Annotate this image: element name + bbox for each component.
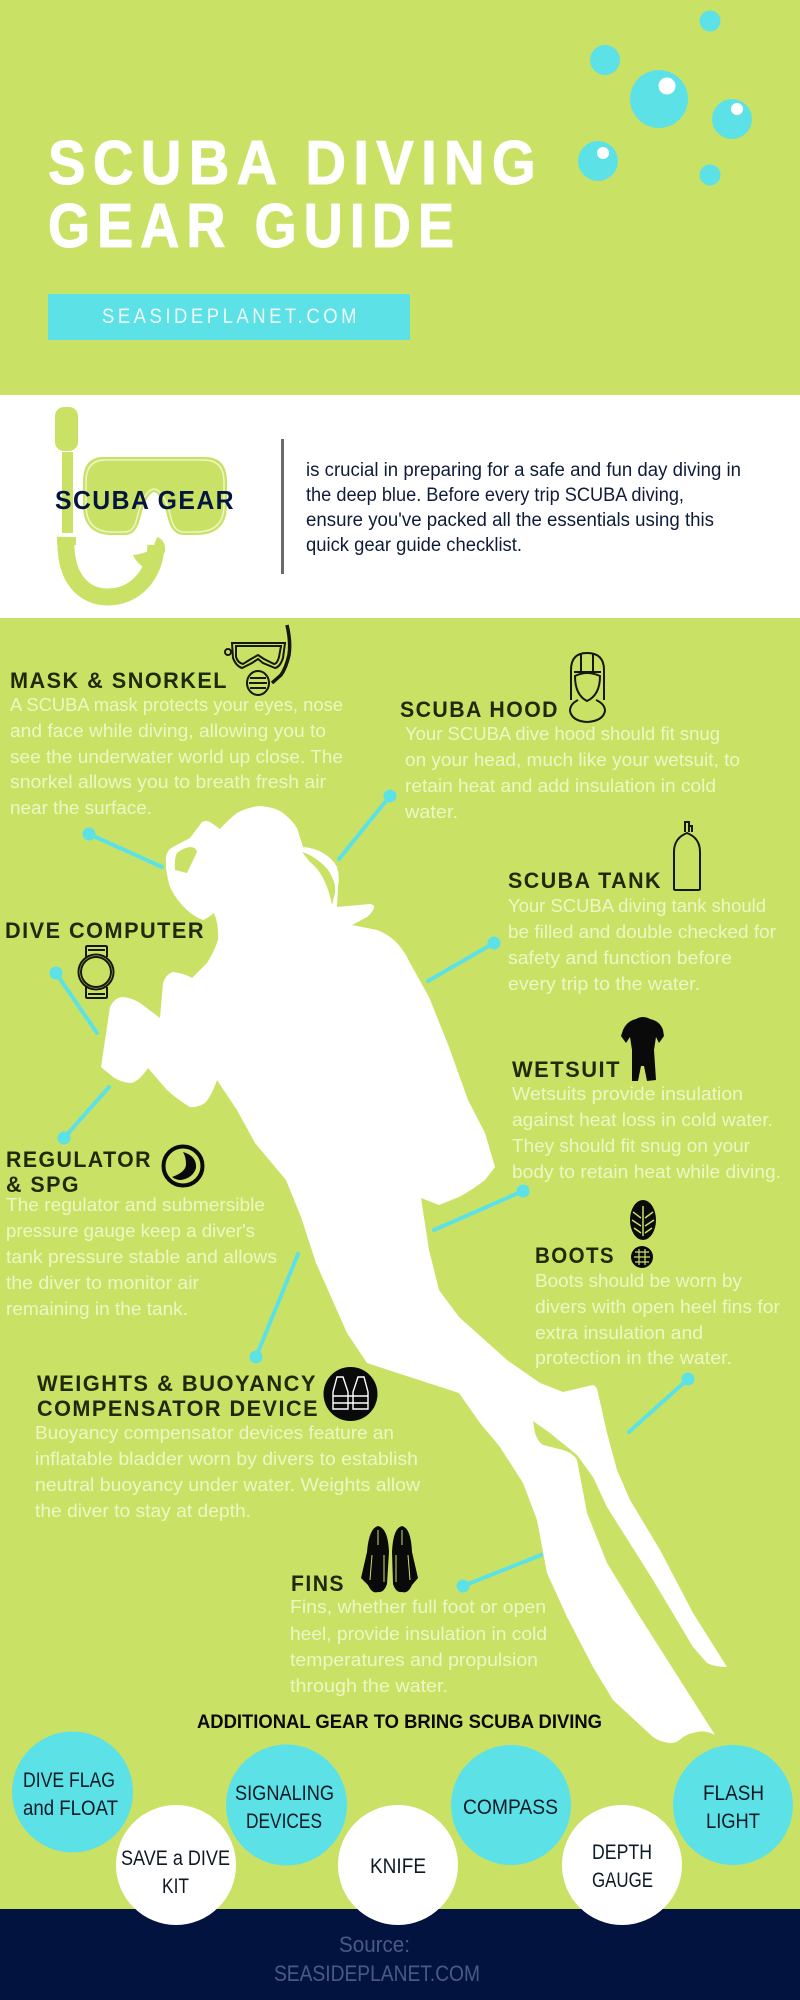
body text: divers with open heel fins for: [535, 1296, 780, 1317]
circle: flash light: [673, 1745, 793, 1865]
icon: watch: [78, 946, 114, 998]
body text: heel, provide insulation in cold: [290, 1623, 547, 1644]
body text: through the water.: [290, 1675, 448, 1696]
circle: signaling devices: [226, 1744, 347, 1866]
intro text: the deep blue. Before every trip SCUBA diving,: [306, 485, 684, 506]
heading: BOOTS: [535, 1243, 615, 1268]
intro text: is crucial in preparing for a safe and fun day diving in: [306, 460, 741, 481]
circle: save a dive kit: KIT: [162, 1875, 189, 1898]
heading: scuba gear: SCUBA GEAR: [55, 485, 235, 515]
panel: dive computer: [5, 918, 205, 998]
body text: temperatures and propulsion: [290, 1649, 538, 1670]
connector: fins: [456, 1555, 541, 1592]
circle: dive flag and float: and FLOAT: [23, 1797, 118, 1820]
connector: weights: [250, 1254, 298, 1364]
icon: pressure gauge: [164, 1146, 202, 1186]
circle: depth gauge: DEPTH: [592, 1841, 652, 1864]
circle: knife: KNIFE: [370, 1855, 426, 1878]
body text: Wetsuits provide insulation: [512, 1083, 743, 1104]
circle: compass: COMPASS: [463, 1796, 558, 1819]
circle: save a dive kit: SAVE a DIVE: [121, 1847, 230, 1870]
title: SCUBA DIVING: [48, 129, 543, 198]
body text: against heat loss in cold water.: [512, 1109, 773, 1130]
body text: [512, 1083, 781, 1182]
heading: WEIGHTS & BUOYANCY: [37, 1371, 317, 1396]
heading: additional gear: ADDITIONAL GEAR TO BRING SCUBA DIVING: [197, 1712, 602, 1733]
body text: every trip to the water.: [508, 973, 700, 994]
circle: signaling devices: DEVICES: [246, 1810, 322, 1833]
body text: water.: [404, 801, 458, 822]
source text: SEASIDEPLANET.COM: [274, 1961, 480, 1986]
intro text: quick gear guide checklist.: [306, 535, 522, 556]
connector: dive computer: [50, 966, 97, 1033]
icon: mask and snorkel: [225, 625, 290, 695]
panel: intro band: [0, 395, 800, 618]
body text: near the surface.: [10, 797, 152, 818]
body text: [35, 1422, 421, 1521]
body text: [6, 1194, 277, 1319]
body text: Buoyancy compensator devices feature an: [35, 1422, 394, 1443]
circle: dive flag and float: [12, 1732, 133, 1852]
panel: regulator and spg: [6, 1146, 277, 1319]
source text: Source:: [339, 1932, 410, 1957]
body text: extra insulation and: [535, 1322, 703, 1343]
heading: [6, 1147, 152, 1197]
icon: hood: [570, 653, 605, 722]
icon: tank: [674, 822, 700, 890]
panel: mask and snorkel: [10, 625, 343, 818]
source text: [274, 1932, 480, 1986]
heading: & SPG: [6, 1172, 80, 1197]
body text: [535, 1270, 780, 1368]
body text: [290, 1596, 547, 1696]
body text: retain heat and add insulation in cold: [405, 775, 716, 796]
circle: save a dive kit: [116, 1805, 236, 1925]
icon: vest: [324, 1367, 378, 1421]
intro text: [306, 460, 741, 556]
body text: snorkel allows you to breath fresh air: [10, 771, 326, 792]
panel: scuba hood: [400, 653, 740, 822]
divider: [281, 439, 284, 574]
body text: and face while diving, allowing you to: [10, 720, 326, 741]
body text: see the underwater world up close. The: [10, 746, 343, 767]
heading: SCUBA HOOD: [400, 697, 559, 722]
circle: signaling devices: SIGNALING: [235, 1782, 334, 1805]
body text: Fins, whether full foot or open: [290, 1596, 546, 1617]
website banner: SEASIDEPLANET.COM: [102, 305, 360, 328]
body text: safety and function before: [508, 947, 732, 968]
heading: SCUBA TANK: [508, 868, 662, 893]
title: [48, 129, 543, 261]
panel: wetsuit: [512, 1017, 781, 1182]
website banner: [48, 294, 410, 340]
body text: be filled and double checked for: [508, 921, 776, 942]
circle: dive flag and float: DIVE FLAG: [23, 1769, 115, 1792]
body text: Your SCUBA dive hood should fit snug: [405, 723, 720, 744]
body text: They should fit snug on your: [512, 1135, 750, 1156]
title: GEAR GUIDE: [48, 192, 461, 261]
circle: depth gauge: [562, 1805, 682, 1925]
heading: COMPENSATOR DEVICE: [37, 1396, 319, 1421]
heading: DIVE COMPUTER: [5, 918, 205, 943]
body text: [404, 723, 740, 822]
panel: scuba tank: [508, 822, 776, 994]
body text: [10, 694, 343, 818]
heading: FINS: [291, 1571, 345, 1596]
connector: wetsuit: [434, 1184, 530, 1230]
circle: knife: [338, 1805, 458, 1925]
body text: A SCUBA mask protects your eyes, nose: [10, 694, 343, 715]
panel: header: [48, 10, 752, 340]
icon: wetsuit: [621, 1017, 664, 1081]
panel: fins: [290, 1526, 547, 1696]
body text: body to retain heat while diving.: [512, 1161, 781, 1182]
connector: hood: [339, 790, 396, 859]
panel: weights and buoyancy compensator device: [35, 1367, 421, 1521]
icon: boot soles: [630, 1200, 656, 1268]
body text: the diver to stay at depth.: [35, 1500, 251, 1521]
body text: pressure gauge keep a diver's: [6, 1220, 255, 1241]
intro text: ensure you've packed all the essentials using this: [306, 510, 714, 531]
connector: mask: [82, 828, 162, 867]
body text: neutral buoyancy under water. Weights allow: [35, 1474, 421, 1495]
circle: compass: [451, 1745, 571, 1865]
panel: footer: [0, 1909, 800, 2000]
heading: [37, 1371, 319, 1421]
heading: WETSUIT: [512, 1057, 621, 1082]
connector: boots: [629, 1372, 694, 1432]
body text: The regulator and submersible: [6, 1194, 265, 1215]
circle: flash light: FLASH: [703, 1782, 764, 1805]
body text: remaining in the tank.: [6, 1298, 188, 1319]
body text: Your SCUBA diving tank should: [508, 895, 766, 916]
icon: bubbles: [578, 10, 752, 186]
body text: tank pressure stable and allows: [6, 1246, 277, 1267]
connector: regulator: [58, 1087, 109, 1144]
body text: Boots should be worn by: [535, 1270, 743, 1291]
body text: the diver to monitor air: [6, 1272, 199, 1293]
connector: tank: [428, 936, 500, 981]
icon: large mask and snorkel: [55, 407, 227, 597]
body text: [508, 895, 776, 994]
body text: inflatable bladder worn by divers to establish: [35, 1448, 418, 1469]
heading: REGULATOR: [6, 1147, 152, 1172]
body text: on your head, much like your wetsuit, to: [405, 749, 740, 770]
heading: MASK & SNORKEL: [10, 668, 228, 693]
panel: boots: [535, 1200, 780, 1368]
circle: depth gauge: GAUGE: [592, 1869, 653, 1892]
body text: protection in the water.: [535, 1347, 732, 1368]
icon: fins: [361, 1526, 418, 1592]
circle: flash light: LIGHT: [706, 1810, 760, 1833]
diver silhouette: [101, 806, 727, 1743]
